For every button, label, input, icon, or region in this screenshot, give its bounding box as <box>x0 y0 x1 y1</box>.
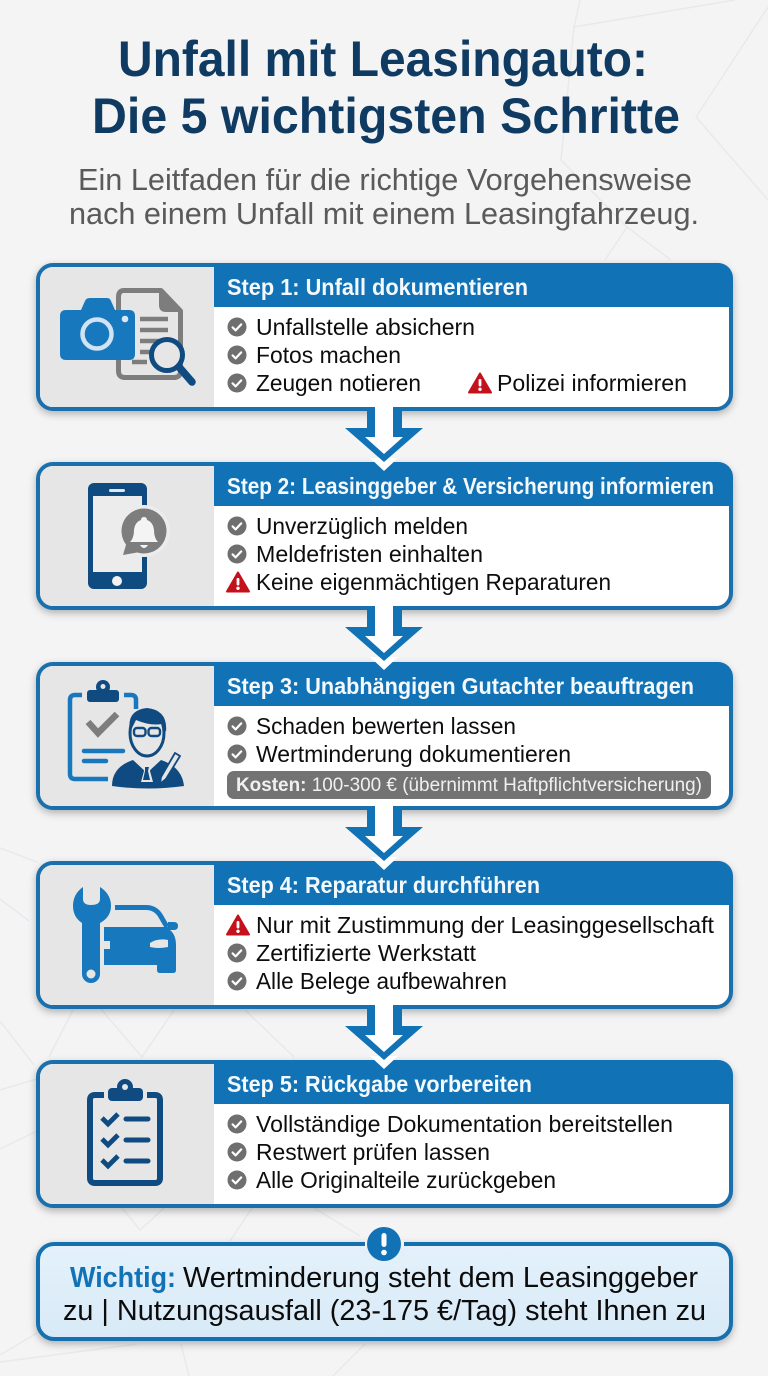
arrow: step 2 to 3 <box>345 605 423 670</box>
icon: exclamation mark <box>367 1227 401 1261</box>
icon: camera and document <box>60 290 192 382</box>
step 5 header: Step 5: Rückgabe vorbereiten <box>227 1071 532 1097</box>
step 5 header <box>214 1060 733 1104</box>
title: Unfall mit Leasingauto: <box>118 31 648 87</box>
step 2 list: Meldefristen einhalten <box>256 541 483 567</box>
icon: wrench and car <box>73 887 178 983</box>
callout: important note <box>38 1227 731 1339</box>
arrow: step 1 to 2 <box>345 406 423 471</box>
step 1 list: Fotos machen <box>256 342 401 368</box>
step 1 list <box>228 314 687 396</box>
subtitle: nach einem Unfall mit einem Leasingfahrzeug. <box>69 196 699 231</box>
panel: step 2 <box>38 462 733 608</box>
step 3 list <box>228 713 571 767</box>
icon: checklist clipboard <box>90 1079 160 1183</box>
icon: expert with clipboard <box>70 680 184 788</box>
step 1 header <box>214 263 733 307</box>
title: Die 5 wichtigsten Schritte <box>92 88 680 144</box>
subtitle <box>69 162 699 231</box>
step 5 list: Alle Originalteile zurückgeben <box>256 1167 556 1193</box>
step 2 list: Keine eigenmächtigen Reparaturen <box>256 569 611 595</box>
step 5 list <box>228 1111 673 1193</box>
step 1 list: Polizei informieren <box>497 370 687 396</box>
step 4 header: Step 4: Reparatur durchführen <box>227 872 540 898</box>
step 4 list: Nur mit Zustimmung der Leasinggesellschaft <box>256 912 715 938</box>
step 1 list: Zeugen notieren <box>256 370 421 396</box>
step 2 list <box>227 513 611 595</box>
callout text <box>63 1262 706 1327</box>
arrow: step 4 to 5 <box>345 1004 423 1069</box>
step 2 header <box>214 462 733 506</box>
panel: step 1 <box>38 263 733 409</box>
step 4 list: Alle Belege aufbewahren <box>256 968 507 994</box>
step 5 list: Restwert prüfen lassen <box>256 1139 490 1165</box>
cost note: Kosten: 100-300 € (übernimmt Haftpflichtversicherung) <box>236 775 702 796</box>
subtitle: Ein Leitfaden für die richtige Vorgehensweise <box>78 162 692 197</box>
panel: step 3 <box>38 662 733 808</box>
step 4 list <box>227 912 715 994</box>
step 3 header: Step 3: Unabhängigen Gutachter beauftragen <box>227 673 694 699</box>
callout text: zu | Nutzungsausfall (23-175 €/Tag) steht Ihnen zu <box>63 1295 706 1327</box>
title <box>92 31 680 144</box>
callout text: Wertminderung steht dem Leasinggeber <box>183 1262 698 1294</box>
step 3 header <box>214 662 733 706</box>
step 1 header: Step 1: Unfall dokumentieren <box>227 274 528 300</box>
step 3 list: Schaden bewerten lassen <box>256 713 516 739</box>
step 5 list: Vollständige Dokumentation bereitstellen <box>256 1111 673 1137</box>
panel: step 5 <box>38 1060 733 1206</box>
step 4 list: Zertifizierte Werkstatt <box>256 940 477 966</box>
icon: phone with bell <box>88 483 170 589</box>
step 2 header: Step 2: Leasinggeber & Versicherung informieren <box>227 473 714 499</box>
step 4 header <box>214 861 733 905</box>
callout text: Wichtig: <box>70 1262 176 1294</box>
step 2 list: Unverzüglich melden <box>256 513 468 539</box>
arrow: step 3 to 4 <box>345 805 423 870</box>
step 3 list: Wertminderung dokumentieren <box>256 741 571 767</box>
step 1 list: Unfallstelle absichern <box>256 314 475 340</box>
panel: step 4 <box>38 861 733 1007</box>
